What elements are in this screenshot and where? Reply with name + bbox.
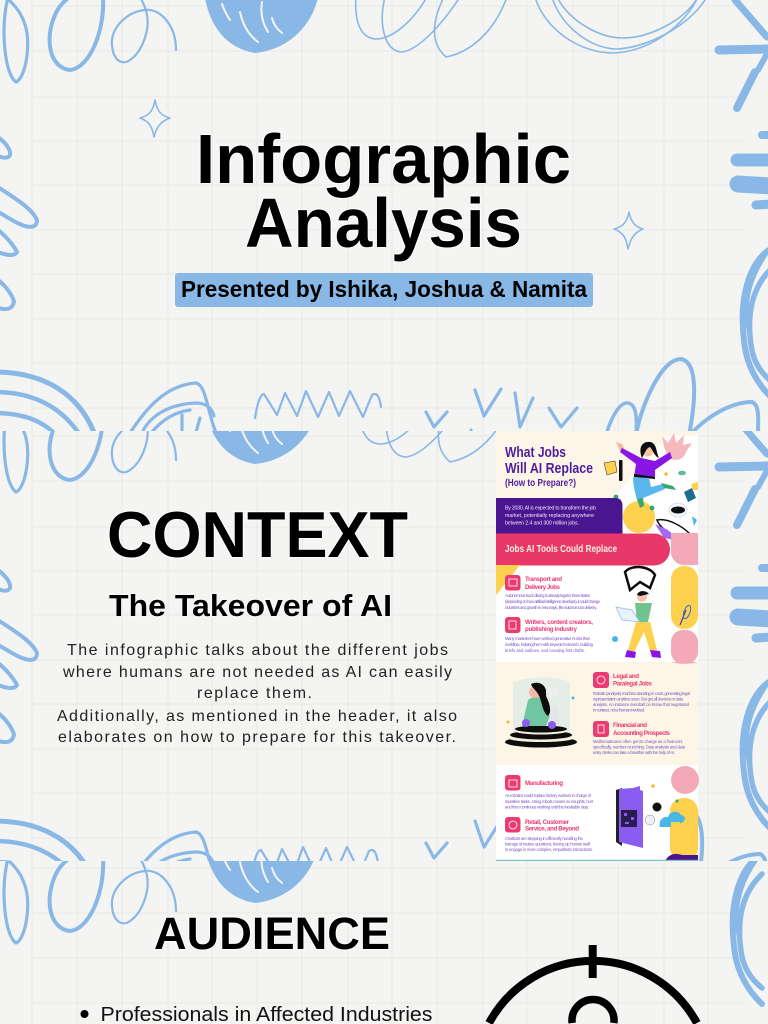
title: Analysis xyxy=(245,184,522,262)
slide 2: context xyxy=(0,431,768,861)
blue doodles, sides xyxy=(0,568,768,830)
job: legal and paralegal: Robotic (analysis) machine standing in court, generating legal xyxy=(593,691,690,696)
purple intro band: market, potentially replacing anywhere xyxy=(505,513,594,519)
job: legal and paralegal: in contract, not a human involved. xyxy=(593,708,645,712)
infographic title: Will AI Replace xyxy=(505,460,593,477)
slide 3: audience xyxy=(4,848,762,1024)
blue doodles, top xyxy=(2,431,768,529)
slide 1: title slide xyxy=(0,0,768,435)
job: writers, content creators: publishing industry xyxy=(525,626,578,633)
presenters pill: Presented by Ishika, Joshua & Namita xyxy=(181,276,587,302)
job: financial and accounting: entry clerks can take a breather with the help of AI. xyxy=(593,750,675,755)
job: legal and paralegal: Legal and xyxy=(613,673,639,680)
title: Infographic xyxy=(196,120,571,198)
job: manufacturing: As robotics could replace factory workers in charge of xyxy=(505,793,592,798)
job: retail and customer service: Chatbots are stepping in efficiently handling the xyxy=(505,836,584,841)
illustration: phone with robot and cloud xyxy=(616,784,685,848)
job: financial and accounting xyxy=(593,721,686,755)
job: retail and customer service: Retail, Customer xyxy=(525,819,570,826)
job: transport and delivery: (depending on how artificial intelligence develops), it could change xyxy=(505,599,601,604)
heading: context: CONTEXT xyxy=(107,498,408,571)
body text: Additionally, as mentioned in the header, it also xyxy=(57,708,457,725)
infographic title xyxy=(505,444,593,489)
job: retail and customer service: barrage of routine questions, freeing up human staff xyxy=(505,842,591,846)
illustration: jumping woman xyxy=(604,433,698,541)
job: transport and delivery: Delivery Jobs xyxy=(525,584,561,591)
bottom white section shapes xyxy=(665,766,699,861)
job: financial and accounting: Mathematicians often get its charge as a financier, xyxy=(593,739,683,744)
side shapes xyxy=(496,533,698,664)
panel: cream middle section xyxy=(496,662,698,765)
job: transport and delivery xyxy=(505,575,601,610)
illustration: man with laptop xyxy=(612,567,661,658)
blue doodles, top and sides xyxy=(0,0,768,398)
job: writers, content creators: workflow, helping them with keyword research, building xyxy=(505,642,594,647)
job: legal and paralegal: Paralegal Jobs xyxy=(613,680,653,688)
header band xyxy=(496,431,698,500)
job: financial and accounting: specifically, number-crunching. Data analysts and data xyxy=(593,744,686,750)
body text: The infographic talks about the different jobs xyxy=(67,642,448,659)
pink section header: Jobs AI Tools Could Replace xyxy=(505,544,617,555)
icon: sparkle right xyxy=(614,212,643,249)
job: retail and customer service xyxy=(505,817,593,852)
pink section header xyxy=(496,534,670,566)
infographic title: (How to Prepare?) xyxy=(505,477,576,489)
grid paper pattern xyxy=(32,0,745,431)
job: manufacturing: and then continues working until the inevitable stop. xyxy=(505,804,589,810)
job: legal and paralegal xyxy=(593,672,690,712)
job: financial and accounting: Financial and xyxy=(613,722,647,729)
blue doodles xyxy=(4,848,762,1004)
subheading: The Takeover of AI xyxy=(109,588,392,623)
job: writers, content creators: briefs and outlines, and creating first drafts. xyxy=(505,648,585,653)
grid paper pattern xyxy=(32,861,745,1024)
job: financial and accounting: Accounting Prospects xyxy=(613,730,671,737)
heading: audience: AUDIENCE xyxy=(154,908,390,959)
bullet item xyxy=(80,1006,432,1021)
job: retail and customer service: Service, and Beyond xyxy=(525,826,579,832)
body text xyxy=(57,642,457,746)
bottom edge line xyxy=(496,860,698,861)
purple intro band: By 2030, AI is expected to transform the job xyxy=(505,506,596,512)
job: legal and paralegal: analysis. An instance overdraft on its law that negotiated xyxy=(593,702,690,707)
icon: target xyxy=(489,945,697,1023)
purple intro band xyxy=(496,498,622,534)
job: writers, content creators: Many marketers have worked generative AI into their xyxy=(505,636,591,641)
job: writers, content creators xyxy=(505,617,594,653)
infographic title: What Jobs xyxy=(505,444,566,461)
job: retail and customer service: to engage in more complex, empathetic interactions. xyxy=(505,847,593,852)
title xyxy=(196,120,571,262)
job: writers, content creators: Writers, content creators, xyxy=(525,619,593,626)
job: transport and delivery: industries and growth in new ways, like autonomous delivery. xyxy=(505,605,597,610)
grid paper pattern xyxy=(32,430,745,861)
job: legal and paralegal: representation anytime soon. But get all devices or data xyxy=(593,696,684,702)
body text: where humans are not needed as AI can easily xyxy=(62,664,452,681)
illustration: robot embrace on pedestal xyxy=(505,678,577,748)
job: transport and delivery: Transport and xyxy=(525,576,562,583)
blue doodles, bottom xyxy=(0,814,768,861)
job: transport and delivery: Autonomous truck driving is already legal in three states xyxy=(505,593,590,598)
icon: sparkle left xyxy=(140,100,170,137)
job: manufacturing: repetitive tasks. Using robots means no naughts, hurt xyxy=(505,799,594,804)
body text: elaborates on how to prepare for this takeover. xyxy=(58,729,456,746)
blue doodles, bottom row xyxy=(0,359,758,435)
purple intro band: between 2.4 and 300 million jobs. xyxy=(505,520,579,526)
job: manufacturing: Manufacturing xyxy=(525,780,563,787)
panel: infographic thumbnail xyxy=(496,431,699,861)
body text: replace them. xyxy=(197,685,312,702)
job: manufacturing xyxy=(505,775,594,810)
